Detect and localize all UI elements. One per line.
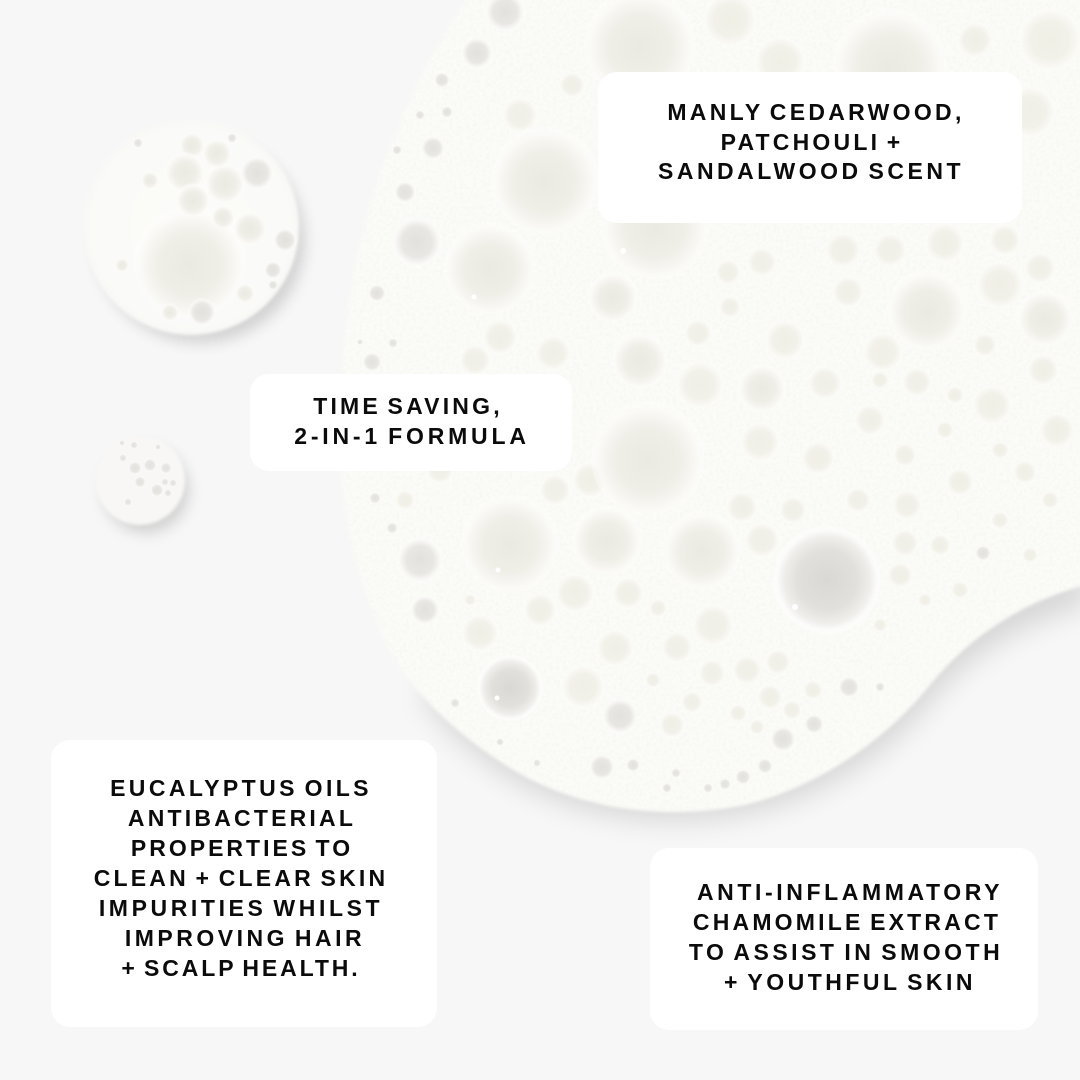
soft bubbles [395, 0, 1080, 738]
callout: eucalyptus: IMPURITIES WHILST [99, 895, 383, 921]
callout: eucalyptus: + SCALP HEALTH. [121, 955, 361, 981]
callout: formula: TIME SAVING, [313, 393, 503, 419]
callout: scent: PATCHOULI + [721, 129, 903, 155]
small foam drop [95, 435, 188, 532]
callout: chamomile: ANTI-INFLAMMATORY [697, 879, 1003, 905]
sparkle highlights [416, 248, 798, 700]
medium foam drop [83, 119, 304, 342]
callout: eucalyptus: CLEAN + CLEAR SKIN [94, 865, 388, 891]
callout: eucalyptus: IMPROVING HAIR [125, 925, 365, 951]
callout: scent [598, 72, 1022, 223]
callout: eucalyptus: PROPERTIES TO [131, 835, 353, 861]
callout: eucalyptus: ANTIBACTERIAL [128, 805, 356, 831]
callout: eucalyptus [51, 740, 437, 1027]
callout: chamomile: TO ASSIST IN SMOOTH [689, 939, 1003, 965]
callout: formula [250, 374, 572, 471]
callout: chamomile: + YOUTHFUL SKIN [724, 969, 976, 995]
callout: chamomile: CHAMOMILE EXTRACT [693, 909, 1001, 935]
callout: scent: SANDALWOOD SCENT [658, 158, 964, 184]
dark bubbles [357, 0, 991, 793]
callout: formula: 2-IN-1 FORMULA [294, 423, 530, 449]
foam shadow [418, 569, 1080, 821]
callout: eucalyptus: EUCALYPTUS OILS [110, 775, 372, 801]
callout: scent: MANLY CEDARWOOD, [667, 99, 965, 125]
mid bubbles [444, 0, 1073, 592]
main foam blob [340, 0, 1080, 812]
deepest bubbles [477, 526, 881, 721]
callout: chamomile [650, 848, 1038, 1030]
